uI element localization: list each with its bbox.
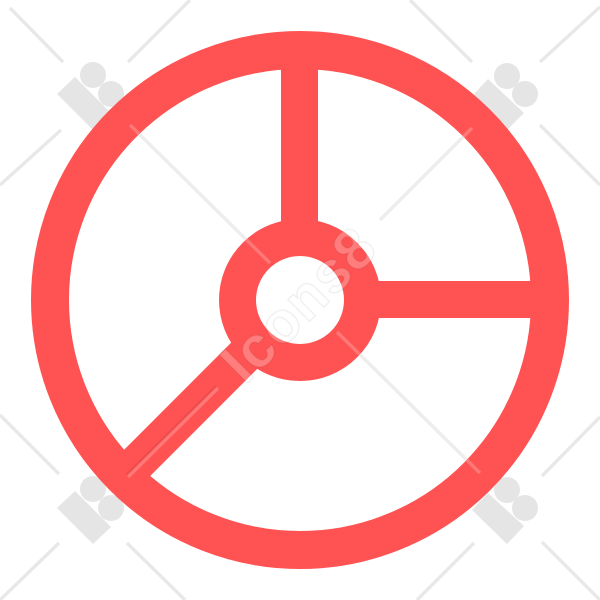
watermark logo: top left (57, 62, 124, 130)
outer ring (50, 50, 550, 550)
inner ring (238, 238, 362, 362)
watermark text: Icons8 (208, 215, 389, 395)
pie chart icon (50, 50, 550, 550)
watermark logo: top right (472, 63, 538, 130)
watermark logo: bottom left (57, 476, 124, 544)
spoke: lower left (130, 350, 250, 470)
watermark logo: bottom right (472, 477, 538, 544)
spoke: top (281, 60, 318, 230)
spoke: right (370, 281, 540, 318)
